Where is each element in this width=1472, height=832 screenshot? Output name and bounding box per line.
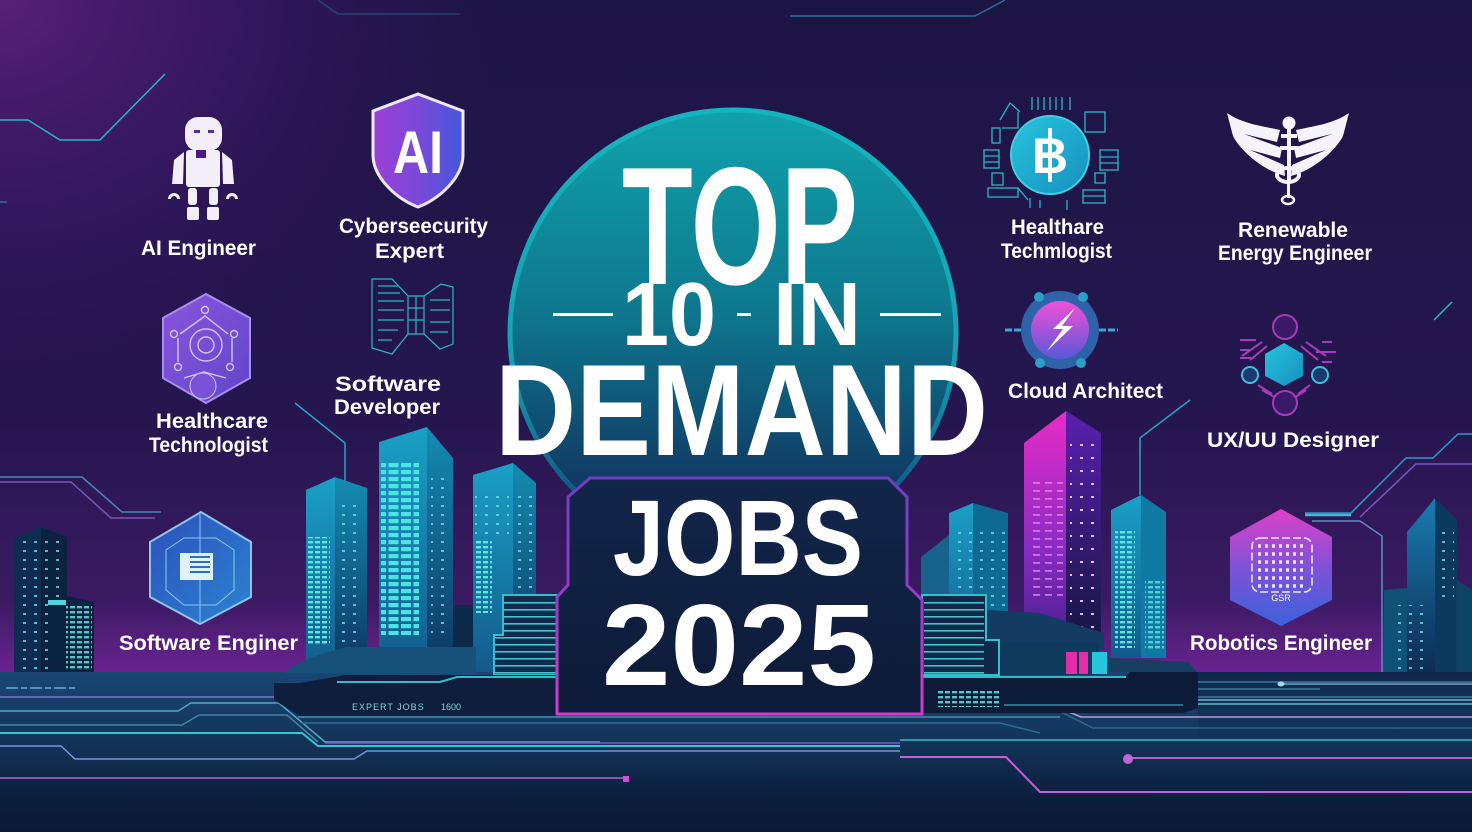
- circuit lines lower: [0, 682, 1472, 792]
- label: Healthcare Technologist 2: Healthare: [1011, 216, 1104, 239]
- icon: robot: [168, 117, 238, 220]
- label: Renewable Energy Engineer: Energy Engineer: [1218, 242, 1372, 265]
- icon: software hexagon: [150, 512, 251, 624]
- label: Healthcare Technologist 2: Techmlogist: [1001, 240, 1112, 263]
- label: Cybersecurity Expert: [339, 215, 488, 263]
- icon: healthcare hexagon: [163, 294, 250, 403]
- skyline left: [14, 427, 557, 716]
- icon: hex network: [1240, 315, 1336, 415]
- shield letters: AI: [393, 119, 443, 186]
- icon: lightning cloud: [1005, 291, 1118, 369]
- label: Robotics Engineer: Robotics Engineer: [1190, 632, 1372, 655]
- far left towers: [14, 527, 94, 672]
- label: Cloud Architect: Cloud Architect: [1008, 380, 1163, 403]
- skyline right: [921, 411, 1472, 713]
- title line: 2025: 2025: [602, 580, 876, 710]
- magenta tower: [1024, 411, 1101, 650]
- central circle: [510, 110, 956, 556]
- icon: circular B chip: B: [1032, 128, 1068, 184]
- podium sign: EXPERT JOBS: [352, 702, 425, 712]
- label: Renewable Energy Engineer: [1218, 219, 1372, 265]
- hexagon caption: GSR: [1271, 593, 1291, 603]
- circuit node: [1123, 754, 1133, 764]
- title line: JOBS: JOBS: [613, 477, 863, 598]
- label: Cybersecurity Expert: Cyberseecurity: [339, 215, 488, 238]
- icon: circuit chip: [372, 279, 453, 354]
- title box: [557, 478, 922, 714]
- far right tower: [1384, 498, 1472, 672]
- label: Healthcare Technologist: [149, 410, 268, 457]
- label: Software Developer: Developer: [334, 396, 440, 419]
- label: AI Engineer: AI Engineer: [141, 237, 256, 260]
- icon: AI shield: [373, 94, 463, 207]
- label: Healthcare Technologist 2: [1001, 216, 1112, 263]
- tower 2: [306, 477, 367, 672]
- icon: robotics hexagon: [1230, 509, 1332, 626]
- teal tower: [921, 503, 1008, 660]
- cyan tower: [1111, 495, 1166, 658]
- tower 3: [379, 427, 453, 672]
- label: Healthcare Technologist: Healthcare: [156, 410, 268, 433]
- label: Software Developer: Software: [335, 373, 441, 396]
- icon: circular B chip: [984, 97, 1118, 210]
- tower 4: [453, 463, 536, 672]
- label: UX/UI Designer: UX/UU Designer: [1207, 429, 1379, 452]
- title line: TOP: TOP: [622, 132, 858, 320]
- title line: 10 - IN: 10: [622, 265, 716, 365]
- podium left: [274, 595, 557, 716]
- title: [495, 132, 988, 710]
- label: Cybersecurity Expert: Expert: [375, 240, 444, 263]
- circuit node small: [623, 776, 629, 782]
- ground: [0, 672, 1472, 832]
- circuit node right: [1278, 682, 1284, 686]
- label: Software Engineer: Software Enginer: [119, 632, 298, 655]
- title line: 10 - IN: IN: [773, 265, 861, 365]
- title line: DEMAND: DEMAND: [495, 337, 988, 483]
- label: Healthcare Technologist: Technologist: [149, 434, 268, 457]
- title line: 10 - IN: [553, 265, 941, 365]
- label: Software Developer: [334, 373, 441, 419]
- podium number: 1600: [441, 702, 461, 712]
- icon: winged caduceus: [1227, 113, 1349, 204]
- label: Renewable Energy Engineer: Renewable: [1238, 219, 1348, 242]
- podium right: [922, 595, 1198, 713]
